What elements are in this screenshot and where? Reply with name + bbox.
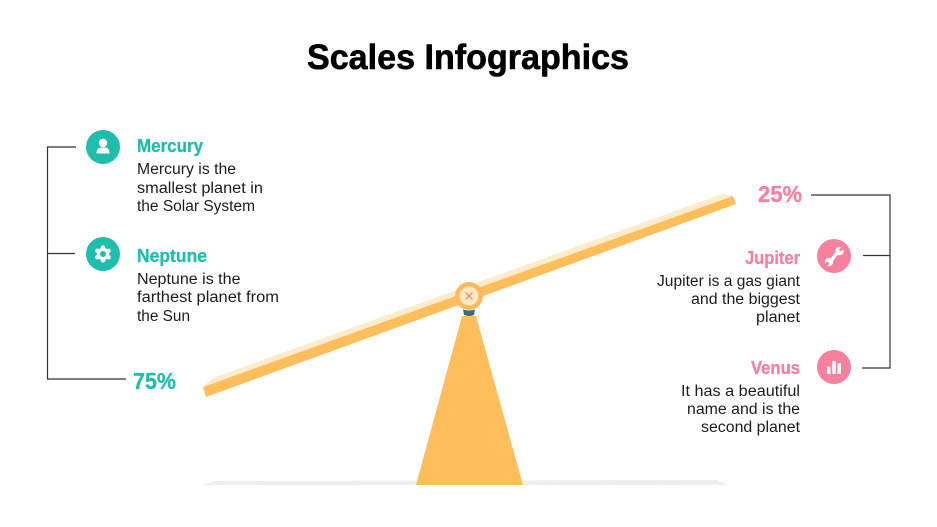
panel: Venus — [681, 350, 851, 436]
pivot inner circle — [460, 286, 478, 306]
left bracket connector — [48, 147, 126, 379]
pivot cap — [463, 310, 475, 316]
icon: user — [86, 130, 120, 164]
text: Neptune description: farthest planet from — [137, 289, 279, 306]
panel: Neptune — [86, 237, 279, 325]
pivot cross — [466, 292, 472, 300]
ground shadow — [203, 480, 728, 485]
heading: Venus: Venus — [751, 358, 800, 378]
heading: Neptune: Neptune — [137, 246, 207, 266]
beam front face — [203, 196, 736, 397]
text: Mercury description: smallest planet in — [137, 180, 263, 197]
title: Scales Infographics — [307, 38, 629, 77]
heading: Jupiter: Jupiter — [745, 248, 800, 268]
icon: gear — [86, 237, 120, 271]
text: Jupiter description: planet — [756, 309, 801, 326]
panel: Jupiter — [657, 239, 851, 326]
icon: bar chart — [817, 350, 851, 384]
text: Jupiter description: and the biggest — [691, 291, 801, 308]
text: Neptune description: the Sun — [137, 308, 190, 325]
text: Neptune description: Neptune is the — [137, 271, 240, 288]
icon: wrench — [817, 239, 851, 273]
text: Venus description: second planet — [701, 419, 801, 436]
text: Venus description: name and is the — [687, 401, 800, 418]
text: Neptune description — [137, 271, 279, 325]
stat: 25%: 25% — [758, 181, 802, 207]
stat: 75%: 75% — [133, 368, 176, 394]
pivot circle — [455, 282, 483, 310]
beam top face — [203, 194, 733, 387]
text: Venus description: It has a beautiful — [681, 383, 800, 400]
text: Mercury description: the Solar System — [137, 198, 255, 215]
heading: Mercury: Mercury — [137, 136, 203, 156]
right bracket connector — [811, 195, 890, 368]
text: Mercury description — [137, 161, 263, 215]
text: Mercury description: Mercury is the — [137, 161, 236, 178]
scale base — [416, 316, 523, 485]
scale illustration — [203, 194, 736, 485]
text: Jupiter description: Jupiter is a gas giant — [657, 273, 801, 290]
text: Jupiter description — [657, 273, 801, 326]
text: Venus description — [681, 383, 801, 436]
panel: Mercury — [86, 130, 263, 215]
